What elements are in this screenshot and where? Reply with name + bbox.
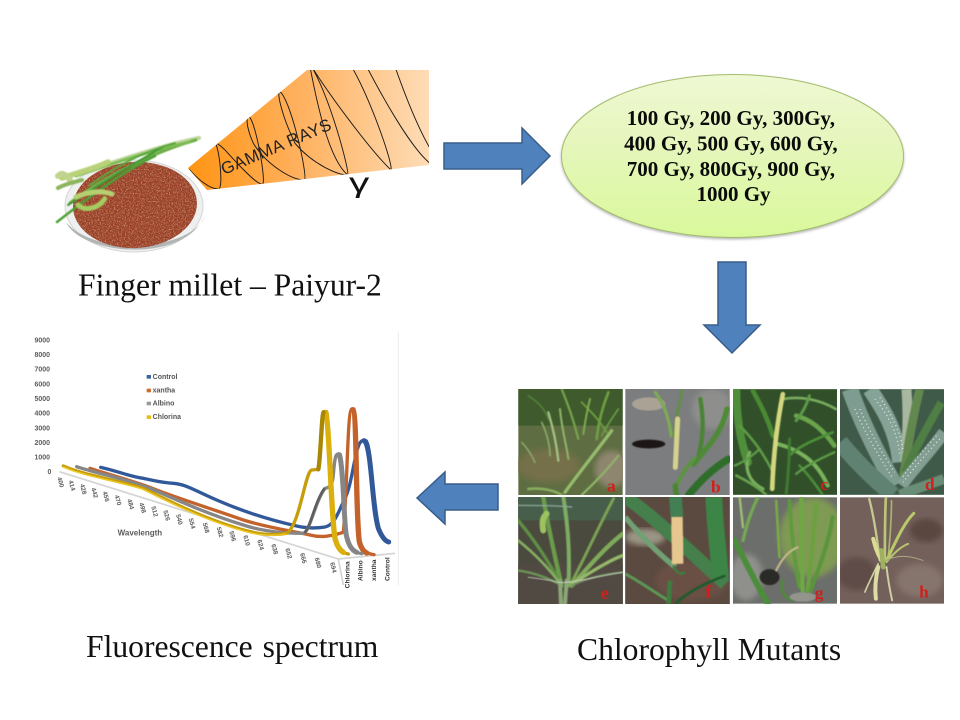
wavelength tick labels: 428: [78, 483, 88, 496]
y axis labels: 6000: [34, 381, 50, 388]
wavelength tick labels: 456: [101, 491, 110, 503]
photo d: [840, 389, 944, 495]
photo e: [518, 497, 623, 604]
label h: h: [919, 583, 929, 602]
photo b: [625, 389, 730, 496]
dose text: 1000 Gy: [696, 182, 771, 206]
arrow: left: [417, 472, 498, 524]
wavelength tick labels: 666: [298, 552, 308, 565]
wavelength tick labels: 568: [201, 522, 210, 534]
y axis labels: 2000: [34, 440, 50, 447]
caption: finger millet: Finger millet – Paiyur-2: [78, 268, 382, 302]
legend: xantha: [153, 387, 175, 394]
wavelength tick labels: 680: [313, 557, 322, 569]
chlorophyll mutant photo grid: [517, 389, 944, 604]
wavelength tick labels: 414: [67, 480, 76, 492]
wavelength tick labels: 624: [255, 539, 265, 551]
series labels: xantha: [371, 559, 378, 581]
photo g: [733, 497, 837, 604]
legend: Control: [153, 374, 178, 381]
wavelength tick labels: 582: [215, 526, 224, 539]
wavelength tick labels: [55, 476, 338, 574]
wavelength tick labels: 470: [113, 494, 122, 507]
label g: g: [815, 584, 824, 603]
gamma symbol: γ: [349, 167, 370, 198]
photo c: [733, 389, 837, 495]
y axis labels: 5000: [34, 396, 50, 403]
wavelength tick labels: 498: [137, 502, 147, 514]
y axis labels: 0: [47, 469, 51, 476]
photo a: [518, 389, 623, 496]
label a: a: [607, 477, 616, 496]
wavelength tick labels: 554: [187, 518, 196, 530]
wavelength tick labels: 526: [161, 510, 171, 522]
gamma wave line: [189, 67, 430, 189]
series labels: [344, 557, 391, 588]
wavelength tick labels: 694: [328, 562, 338, 574]
series labels: Chlorina: [344, 561, 351, 588]
wavelength tick labels: 638: [269, 543, 279, 556]
cone: gamma ray beam: [188, 67, 430, 190]
y axis labels: 3000: [34, 425, 50, 432]
y axis labels: 4000: [34, 411, 50, 418]
wavelength tick labels: 540: [174, 514, 184, 526]
wavelength tick labels: 400: [55, 476, 65, 489]
legend: Albino: [153, 401, 174, 408]
dose text: 700 Gy, 800Gy, 900 Gy,: [627, 157, 835, 181]
spectrum curves: [63, 409, 389, 555]
fluorescence spectrum chart: [34, 332, 398, 588]
wavelength tick labels: 442: [89, 487, 99, 499]
label e: e: [601, 584, 609, 603]
series labels: Control: [384, 557, 391, 581]
legend: [147, 374, 181, 421]
caption: fluorescence spectrum: Fluorescence spectrum: [86, 629, 379, 664]
caption: chlorophyll mutants: Chlorophyll Mutants: [577, 632, 841, 667]
arrow: right: [444, 128, 550, 184]
wavelength tick labels: 512: [149, 506, 159, 518]
legend: Chlorina: [153, 414, 181, 421]
dose oval: [562, 74, 904, 238]
millet bowl image: [57, 138, 208, 257]
wavelength tick labels: 484: [125, 498, 135, 511]
photo f: [625, 497, 730, 604]
label f: f: [705, 582, 711, 601]
label b: b: [711, 477, 721, 496]
label c: c: [820, 475, 828, 494]
y axis labels: 9000: [34, 337, 50, 344]
y axis labels: 7000: [34, 367, 50, 374]
y axis labels: 1000: [34, 455, 50, 462]
axis title: Wavelength: [118, 528, 162, 537]
wavelength tick labels: 596: [227, 530, 237, 543]
wavelength tick labels: 610: [241, 535, 251, 547]
label d: d: [925, 475, 935, 494]
dose text: 100 Gy, 200 Gy, 300Gy,: [627, 106, 835, 130]
y axis labels: [34, 337, 51, 476]
arrow: down: [704, 262, 760, 353]
photo h: [840, 497, 944, 604]
y axis labels: 8000: [34, 352, 50, 359]
label: gamma rays: GAMMA RAYS: [218, 115, 334, 179]
dose text: 400 Gy, 500 Gy, 600 Gy,: [624, 132, 838, 156]
wavelength tick labels: 652: [283, 548, 293, 560]
series labels: Albino: [358, 560, 365, 581]
